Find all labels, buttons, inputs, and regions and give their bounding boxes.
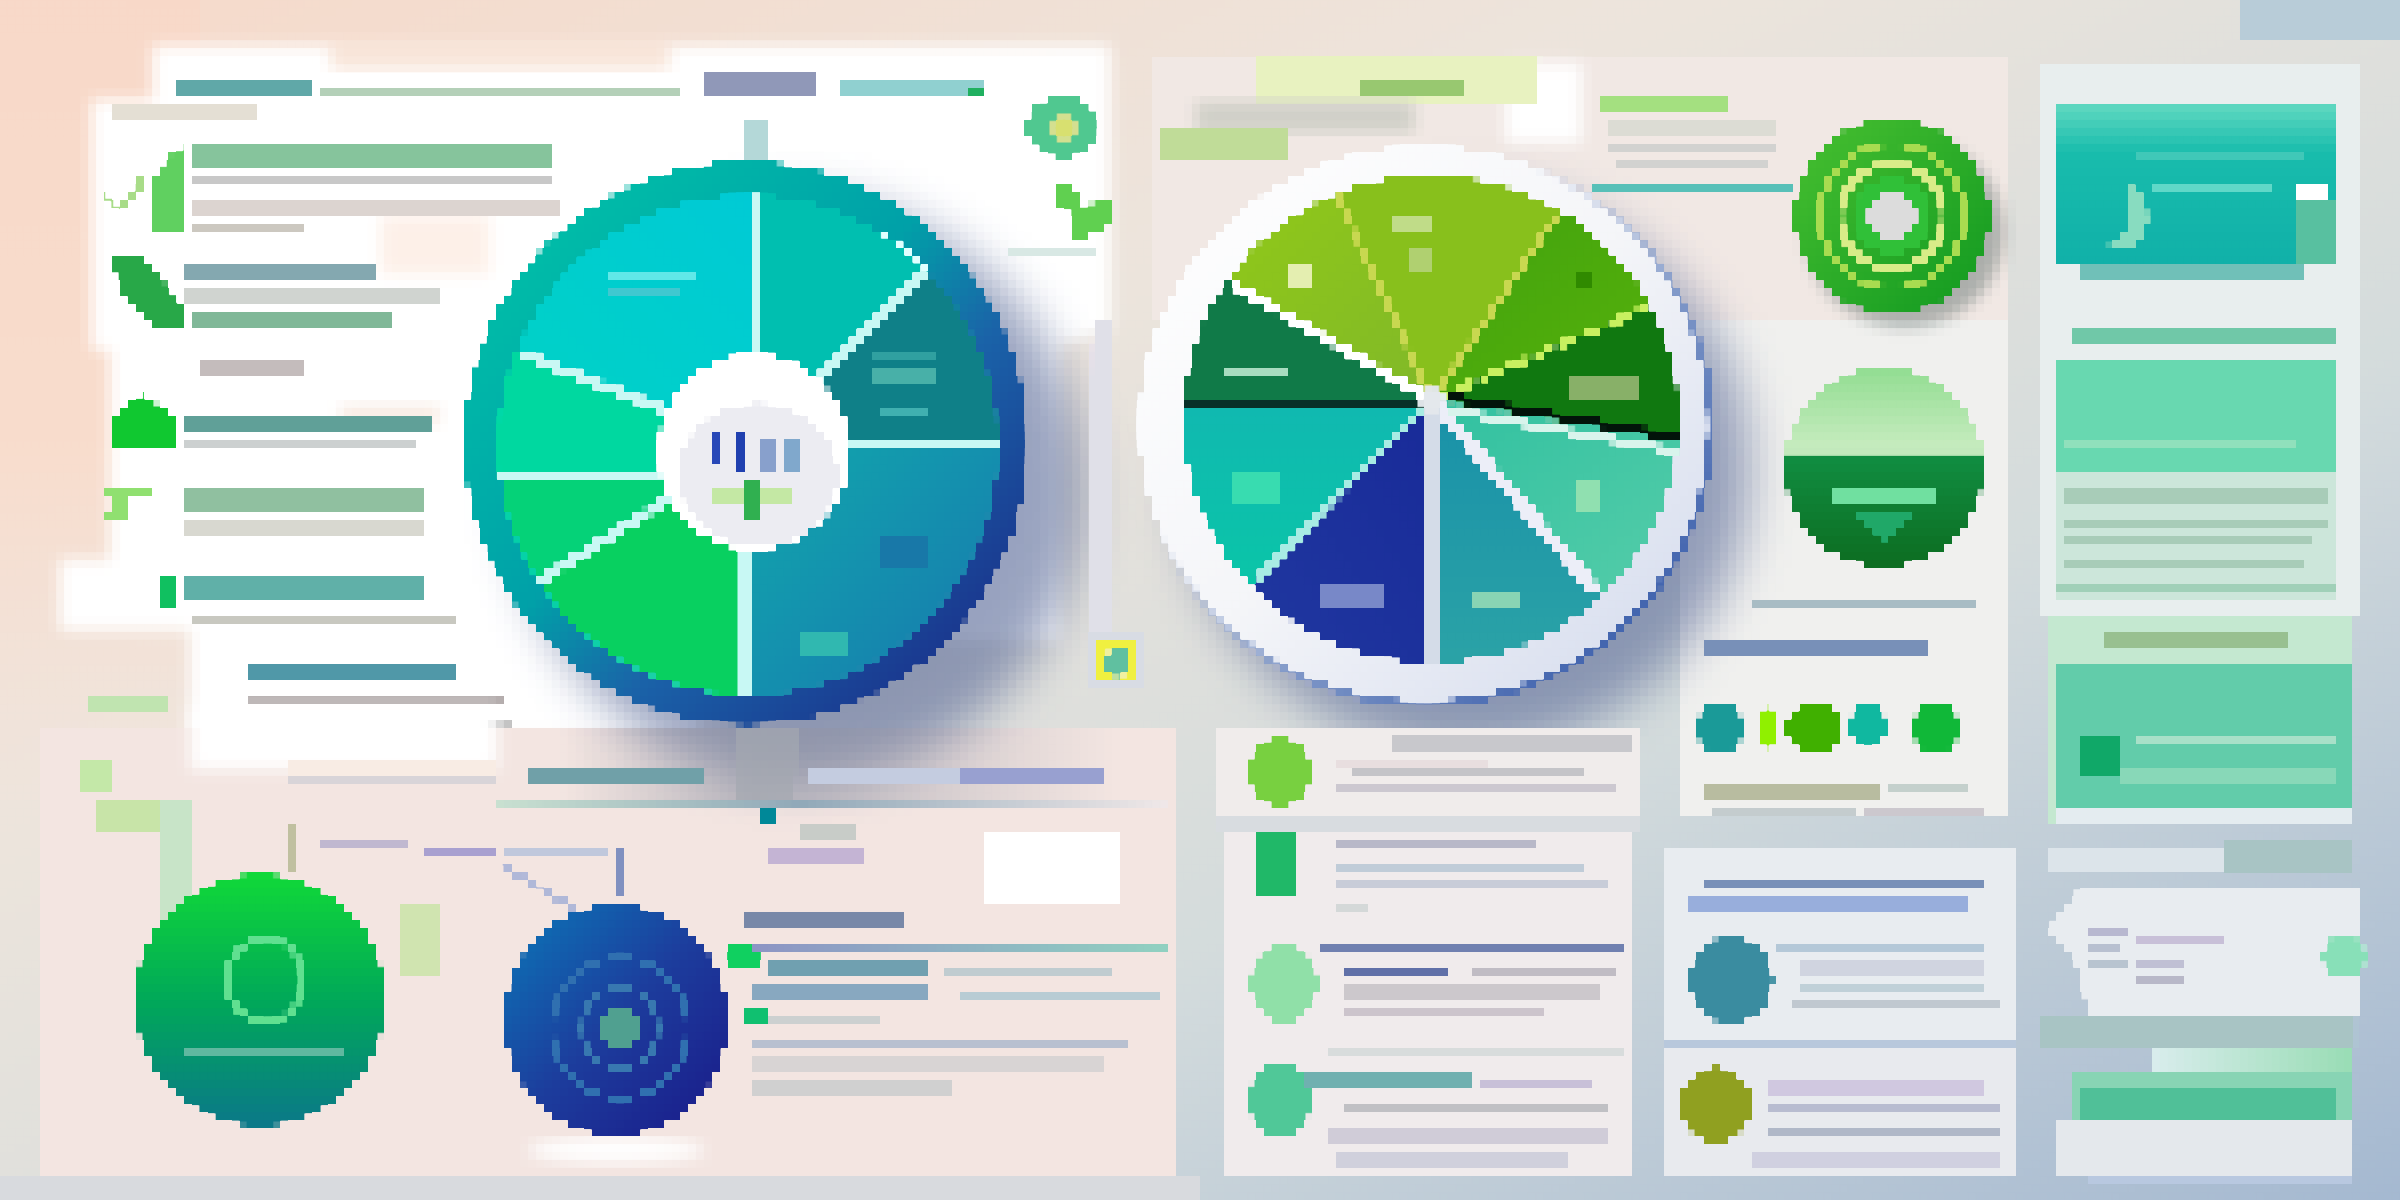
list item 2	[111, 257, 440, 328]
panel: lower left panel	[40, 728, 1176, 1175]
icon: small green mark	[161, 576, 176, 606]
icon: check	[103, 168, 145, 215]
top right icons column	[1010, 96, 1144, 689]
lines	[2056, 473, 2335, 597]
list item 7	[88, 663, 513, 727]
hub sprout	[712, 482, 792, 519]
panel: upper left white panel	[60, 40, 1110, 735]
slices	[934, 0, 1920, 926]
chart: left segmented wheel	[464, 120, 1025, 728]
green text block	[2056, 360, 2335, 472]
panel: top middle panel	[1154, 60, 2008, 322]
outer ring	[464, 161, 1028, 725]
connector	[1092, 320, 1110, 630]
legend dots	[1696, 703, 1960, 753]
small label	[1010, 248, 1094, 256]
icon: green blob	[111, 393, 176, 448]
icon: leaf	[153, 145, 184, 230]
text block: top middle	[1593, 96, 1796, 191]
icon: sprout	[1056, 184, 1110, 239]
bar label	[184, 1048, 344, 1056]
list item 3 label	[199, 360, 302, 374]
chart: green concentric disc	[1794, 118, 2005, 328]
chart: green ball	[1784, 367, 1984, 567]
white ring	[1139, 146, 1711, 704]
chart: large blue circle	[504, 904, 728, 1162]
card 4: middle lower	[1248, 1063, 1608, 1168]
list item 6	[161, 576, 455, 623]
panel: right column bottom	[2042, 1017, 2356, 1183]
centre hub	[658, 354, 850, 550]
icon: pale green badge	[1250, 943, 1318, 1023]
icon: olive badge	[1680, 1067, 1752, 1143]
icon: side badge	[2322, 935, 2366, 979]
slice labels	[1224, 215, 1636, 610]
stem	[744, 119, 768, 169]
icon: teal badge	[1248, 1063, 1312, 1137]
legend block: middle right	[1696, 600, 1984, 816]
bullet	[724, 944, 764, 968]
icon: diagonal leaf	[111, 257, 184, 328]
icon: small branch	[103, 489, 149, 519]
panel: right column third	[2048, 840, 2366, 1016]
list item 5	[103, 489, 425, 535]
panel: middle right panel	[1680, 322, 2008, 816]
panel: right column second	[2048, 615, 2352, 823]
connectors: lower left	[288, 825, 623, 908]
text block: lower centre	[724, 912, 1167, 1096]
shadow: left wheel on lower panel	[560, 728, 1120, 807]
hub figure	[712, 432, 800, 474]
panel: right column top	[2041, 64, 2360, 615]
icon: shield	[2080, 735, 2118, 775]
icon: apple outline	[227, 938, 303, 1022]
top middle banner	[1158, 57, 1540, 160]
icon: green badge	[1248, 737, 1312, 807]
pale foliage decoration	[80, 760, 440, 1050]
icon: green bar	[1256, 832, 1296, 895]
segment labels	[608, 272, 937, 656]
icon: yellow tile	[1090, 631, 1144, 689]
shadow: left wheel	[515, 200, 1085, 780]
header bars: upper left panel	[111, 71, 983, 119]
shadow: right pie	[1180, 190, 1750, 750]
inner white ring	[524, 204, 930, 358]
chart: right pie	[934, 0, 1920, 926]
segments	[496, 192, 1000, 696]
card 2: middle lower tall	[1215, 815, 1640, 1175]
icon: crescent	[2076, 186, 2148, 250]
icon: teal globe	[1689, 936, 1773, 1024]
icon: round badge	[1026, 96, 1100, 158]
card 6: olive icon card	[1663, 1040, 2015, 1175]
list item 4	[111, 393, 432, 448]
chart: large green circle	[134, 874, 386, 1126]
card 1: middle lower	[1215, 728, 1640, 815]
card 5: stats card	[1663, 848, 2015, 1040]
list item 1	[103, 145, 562, 232]
heading	[2072, 328, 2335, 343]
lower left text and rules	[191, 707, 1171, 903]
teal header block	[2056, 104, 2335, 280]
card 3: middle lower	[1250, 943, 1625, 1056]
